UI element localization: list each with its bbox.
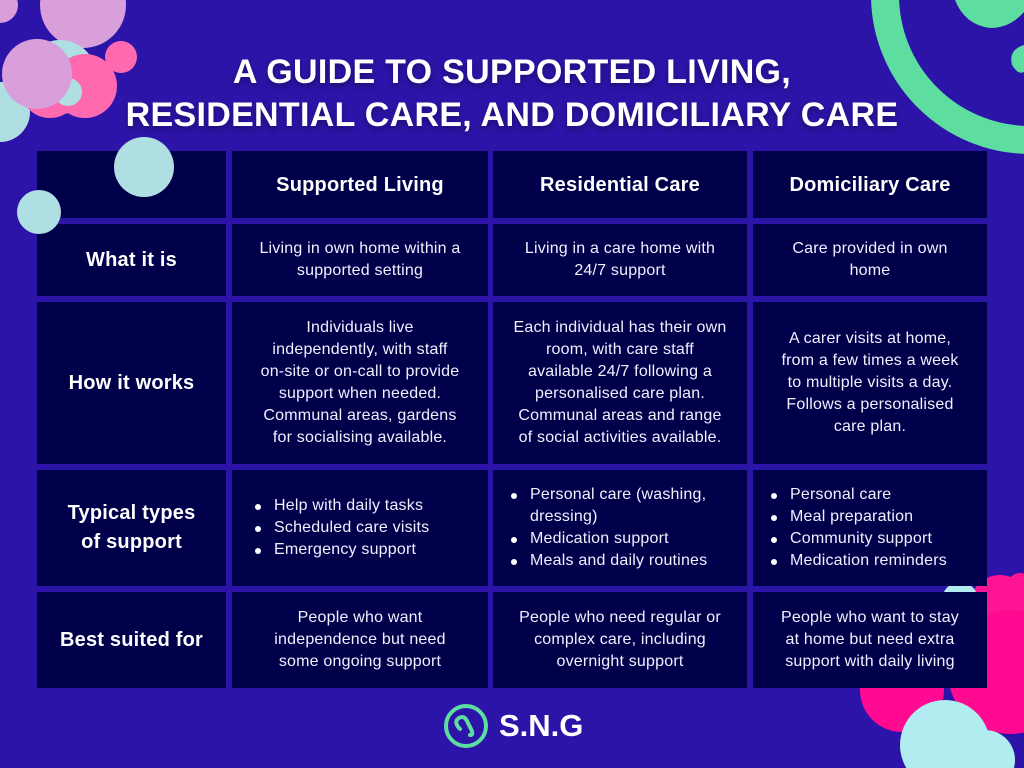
cell: types domiciliary [753,470,987,586]
row header: Best suited for [37,592,226,688]
cell: how domiciliary: care plan. [834,418,906,435]
cell: best supported [232,592,488,688]
cell: what residential [493,224,747,296]
cell: what supported [232,224,488,296]
cell: types residential [493,470,747,586]
cell: how residential: Each individual has their own [513,319,727,336]
cell: types domiciliary: Medication reminders [790,552,947,569]
cell: types domiciliary: Personal care [790,486,891,503]
header: Residential Care [493,151,747,218]
cell: best domiciliary [753,592,987,688]
cell: how supported: Communal areas, gardens [263,407,457,424]
cell: how residential: personalised care plan. [535,385,705,402]
header: Supported Living [232,151,488,218]
cell: types residential: Personal care (washing, [530,486,706,503]
cell: what residential: 24/7 support [574,262,666,279]
cell: types residential: Medication support [530,530,669,547]
cell: what supported: Living in own home within a [259,240,461,257]
icon: heart ring [444,704,488,748]
cell: best domiciliary: People who want to stay [781,609,959,626]
cell: how residential: room, with care staff [546,341,694,358]
cell: how domiciliary: from a few times a week [781,352,959,369]
cell: best residential: overnight support [556,653,684,670]
cell: what domiciliary [753,224,987,296]
row header: Typical types of support [37,470,226,586]
cell: types supported: Help with daily tasks [274,497,423,514]
cell: types residential: dressing) [530,508,598,525]
cell: what residential: Living in a care home with [525,240,715,257]
cell: best supported: People who want [298,609,422,626]
cell: how supported: support when needed. [279,385,441,402]
empty corner cell [37,151,226,218]
title [125,53,898,135]
cell: how residential: of social activities available. [519,429,721,446]
header: Domiciliary Care [753,151,987,218]
cell: what domiciliary: Care provided in own [792,240,948,257]
cell: best residential: People who need regular or [519,609,721,626]
logo: S.N.G [444,704,583,748]
header: Residential Care: Residential Care [540,174,700,196]
row header: How it works: How it works [69,372,194,394]
cell: what supported: supported setting [297,262,423,279]
header: Supported Living: Supported Living [276,174,444,196]
cell: types supported: Emergency support [274,541,416,558]
logo text: S.N.G [499,708,583,743]
row header: Best suited for: Best suited for [60,628,203,650]
title: RESIDENTIAL CARE, AND DOMICILIARY CARE [126,96,898,134]
cell: how domiciliary: to multiple visits a day. [788,374,952,391]
cell: how domiciliary: Follows a personalised [786,396,954,413]
cell: how domiciliary: A carer visits at home, [789,330,951,347]
cell: how supported [232,302,488,464]
cell: best residential [493,592,747,688]
row header: What it is [37,224,226,296]
cell: types domiciliary: Meal preparation [790,508,913,525]
cell: types domiciliary: Community support [790,530,932,547]
cell: types residential: Meals and daily routines [530,552,707,569]
table [37,151,987,688]
cell: types supported [232,470,488,586]
cell: types supported: Scheduled care visits [274,519,429,536]
cell: best supported: some ongoing support [279,653,441,670]
cell: how residential [493,302,747,464]
header: Domiciliary Care: Domiciliary Care [789,174,951,196]
cell: how residential: available 24/7 following a [528,363,712,380]
cell: best supported: independence but need [274,631,446,648]
cell: how supported: on-site or on-call to provide [261,363,459,380]
cell: best residential: complex care, including [534,631,706,648]
cell: how supported: independently, with staff [272,341,448,358]
cell: how residential: Communal areas and range [518,407,722,424]
title: A GUIDE TO SUPPORTED LIVING, [233,53,791,91]
cell: best domiciliary: support with daily living [785,653,955,670]
cell: how supported: Individuals live [306,319,414,336]
row header: What it is: What it is [86,248,177,270]
row header: Typical types of support: of support [81,531,182,553]
row header: Typical types of support: Typical types [68,502,195,524]
row header: How it works [37,302,226,464]
cell: how domiciliary [753,302,987,464]
cell: best domiciliary: at home but need extra [786,631,954,648]
cell: what domiciliary: home [850,262,890,279]
cell: how supported: for socialising available. [273,429,447,446]
